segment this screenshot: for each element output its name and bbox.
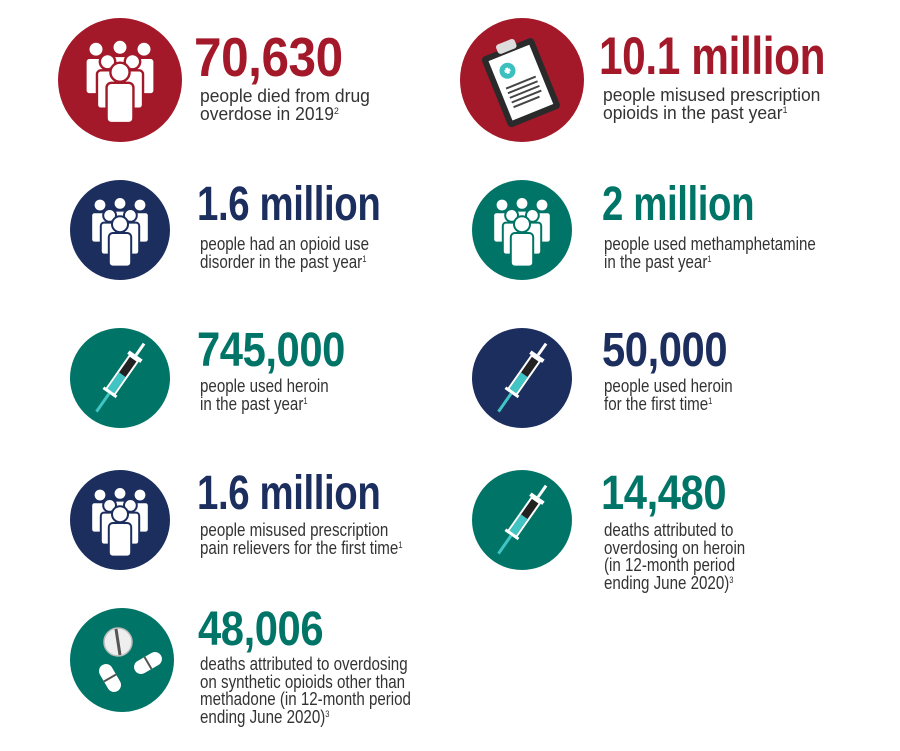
text <box>604 520 745 593</box>
text: people used heroin <box>604 376 733 396</box>
text: methadone (in 12-month period <box>200 689 411 709</box>
text: pain relievers for the first time1 <box>200 538 403 558</box>
text <box>200 520 403 558</box>
text: opioids in the past year1 <box>603 103 787 123</box>
number: 10.1 million <box>599 27 825 86</box>
text: overdosing on heroin <box>604 538 745 558</box>
panel: overdose deaths 2019 <box>58 18 370 142</box>
icon: people red <box>58 18 182 142</box>
text <box>200 654 411 727</box>
number: 745,000 <box>197 324 345 377</box>
number: 50,000 <box>602 324 727 377</box>
text <box>604 376 733 414</box>
icon: people navy <box>70 470 170 570</box>
number: 70,630 <box>194 26 343 88</box>
text: ending June 2020)3 <box>200 706 329 726</box>
text <box>200 234 369 272</box>
number: 48,006 <box>198 603 323 656</box>
text <box>200 86 370 124</box>
icon: syringe navy <box>472 328 572 428</box>
text: people used methamphetamine <box>604 234 816 254</box>
text: people had an opioid use <box>200 234 369 254</box>
icon: people navy <box>70 180 170 280</box>
icon: syringe teal <box>70 328 170 428</box>
text <box>200 376 329 414</box>
number: 1.6 million <box>197 178 380 231</box>
icon: people teal <box>472 180 572 280</box>
panel: methamphetamine <box>472 178 816 280</box>
text: deaths attributed to overdosing <box>200 654 408 674</box>
panel: opioid use disorder <box>70 178 380 280</box>
text: (in 12-month period <box>604 555 735 575</box>
number: 1.6 million <box>197 467 380 520</box>
panel: heroin past year <box>70 324 345 428</box>
text: ending June 2020)3 <box>604 572 733 592</box>
icon: pills <box>70 608 174 712</box>
panel: heroin deaths <box>472 467 745 593</box>
panel: prescription misuse <box>460 18 825 142</box>
icon: syringe teal <box>472 470 572 570</box>
text: on synthetic opioids other than <box>200 672 405 692</box>
panel: pain relievers first time <box>70 467 403 570</box>
panel: synthetic opioid deaths <box>70 603 411 727</box>
text <box>604 234 816 272</box>
text: overdose in 20192 <box>200 104 339 124</box>
text: people died from drug <box>200 86 370 106</box>
text: people misused prescription <box>200 520 388 540</box>
text: people misused prescription <box>603 85 820 105</box>
text: disorder in the past year1 <box>200 252 366 272</box>
number: 2 million <box>602 178 754 231</box>
text <box>603 85 820 123</box>
number: 14,480 <box>601 467 726 520</box>
panel: heroin first time <box>472 324 733 428</box>
text: deaths attributed to <box>604 520 733 540</box>
text: in the past year1 <box>200 394 308 414</box>
icon: clipboard <box>460 18 584 142</box>
text: people used heroin <box>200 376 329 396</box>
text: for the first time1 <box>604 394 712 414</box>
text: in the past year1 <box>604 252 712 272</box>
